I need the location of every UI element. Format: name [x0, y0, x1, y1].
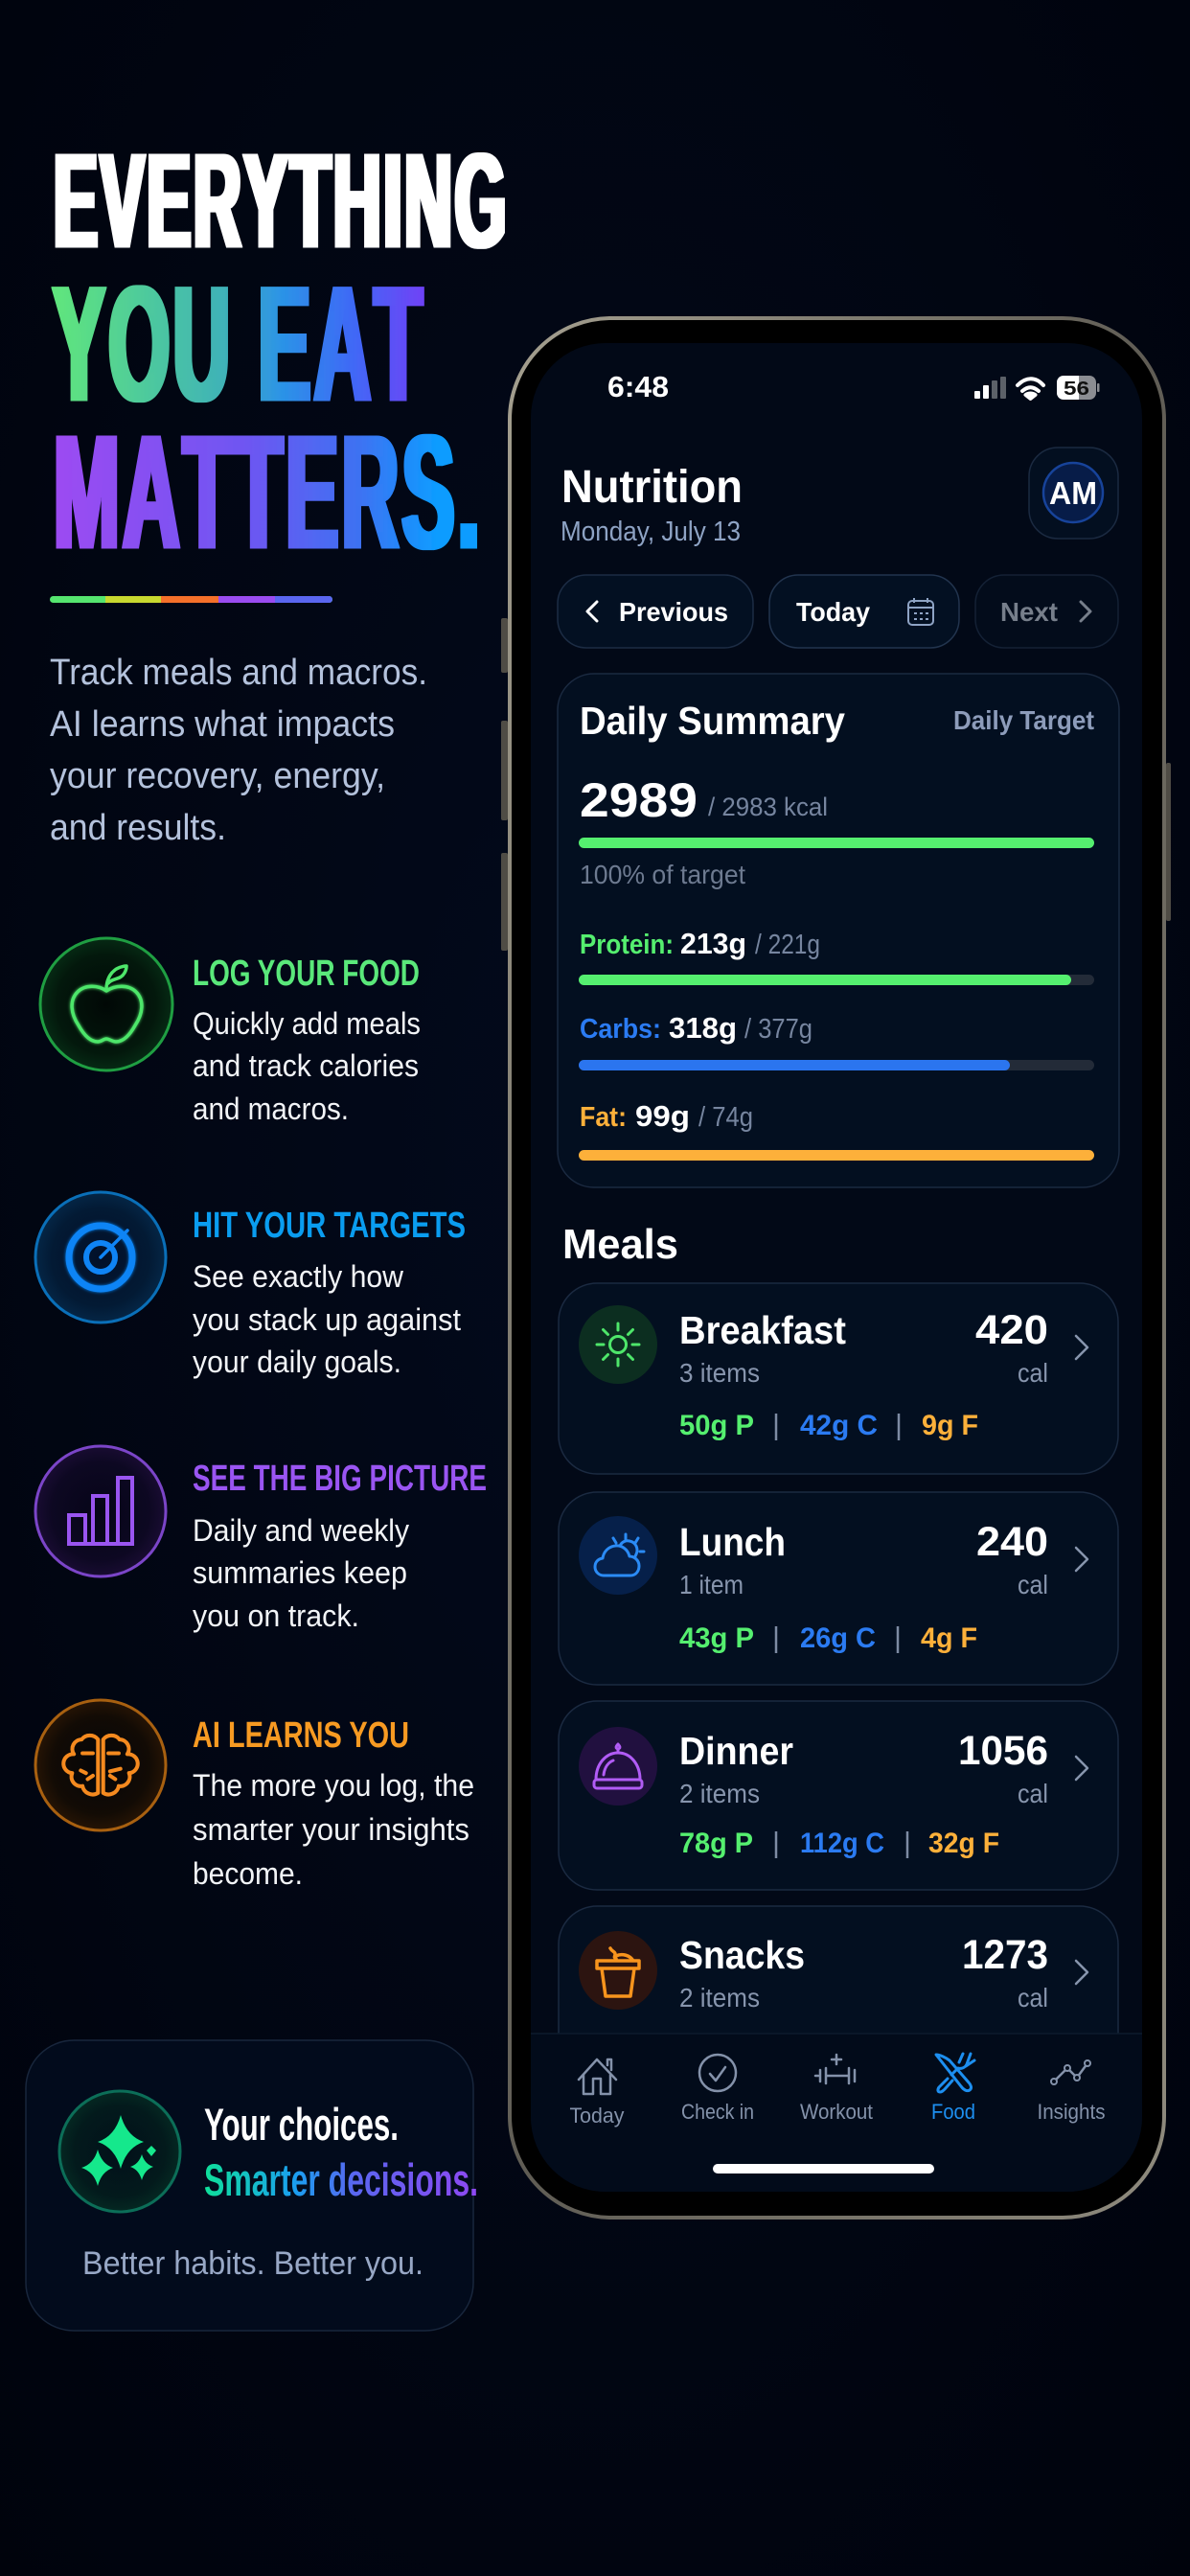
meal: dinner: 32g F [928, 1828, 999, 1859]
protein row: Protein: [580, 930, 674, 960]
status bar [608, 376, 1100, 401]
panel: daily summary: Daily Summary [580, 699, 845, 743]
feature: see the big picture: Daily and weekly [193, 1513, 409, 1548]
meal: lunch: cal [1018, 1570, 1048, 1599]
icon: cloche [579, 1727, 657, 1806]
feature: hit your targets: you stack up against [193, 1302, 461, 1337]
fat row: 99g [635, 1099, 690, 1133]
protein row [579, 933, 1094, 985]
feature: ai learns you [35, 1700, 474, 1891]
meal: breakfast: cal [1018, 1358, 1048, 1388]
intro paragraph [50, 653, 427, 848]
meal: snacks: Snacks [679, 1933, 805, 1977]
fat row: Fat: [580, 1102, 627, 1133]
icon: signal [974, 377, 1006, 399]
meal: breakfast: Breakfast [679, 1308, 846, 1352]
icon: wifi [1018, 379, 1043, 399]
meal: snacks [558, 1905, 1119, 2034]
icon: bar chart [35, 1446, 166, 1576]
carbs row: / 377g [744, 1014, 812, 1045]
icon: brain [35, 1700, 166, 1830]
meal: lunch [559, 1492, 1118, 1685]
nav: workout: Workout [800, 2100, 873, 2124]
avatar [1029, 448, 1118, 539]
feature: see the big picture: you on track. [193, 1598, 359, 1633]
fat row: / 74g [698, 1102, 753, 1133]
meal: breakfast: 420 [975, 1307, 1048, 1353]
meal: dinner: cal [1018, 1779, 1048, 1808]
meal: breakfast [559, 1283, 1118, 1474]
feature: hit your targets: HIT YOUR TARGETS [193, 1206, 466, 1246]
meal: snacks: 1273 [962, 1932, 1048, 1978]
icon: sun [579, 1305, 657, 1384]
nav: insights: Insights [1037, 2100, 1106, 2124]
meal: lunch: 4g F [921, 1622, 977, 1654]
meals heading: Meals [562, 1221, 678, 1268]
meal: breakfast: 9g F [922, 1410, 978, 1441]
panel: daily summary [558, 674, 1119, 1187]
bottom navigation [531, 2033, 1142, 2174]
nav: today [569, 2059, 625, 2128]
button: previous [558, 575, 753, 648]
callout: your choices [26, 2040, 478, 2331]
feature: see the big picture: summaries keep [193, 1555, 407, 1590]
meal: breakfast: 42g C [800, 1410, 878, 1441]
intro paragraph: Track meals and macros. [50, 653, 427, 693]
panel: daily summary: 100% of target [580, 860, 745, 889]
button: next [975, 575, 1118, 648]
button: previous: Previous [619, 597, 728, 627]
button: next: Next [1000, 597, 1058, 627]
calories bar [579, 838, 1094, 848]
nav: check in: Check in [681, 2100, 754, 2124]
icon: apple [40, 938, 172, 1070]
header: Monday, July 13 [561, 517, 741, 547]
panel: daily summary: 2989 [580, 773, 698, 827]
phone screen [531, 343, 1142, 2192]
nav: insights [1037, 2060, 1106, 2124]
button: today: Today [796, 597, 870, 627]
feature: log your food: and track calories [193, 1048, 419, 1083]
callout: your choices: Your choices. [204, 2099, 399, 2150]
icon: snack cup [579, 1931, 657, 2010]
avatar: AM [1049, 475, 1097, 511]
meal: lunch: 43g P [679, 1622, 754, 1654]
meal: lunch: 240 [976, 1519, 1048, 1565]
feature: ai learns you: smarter your insights [193, 1812, 469, 1847]
meal: dinner: 1056 [958, 1728, 1048, 1774]
button: today [769, 575, 959, 648]
feature: hit your targets [35, 1192, 466, 1379]
feature: log your food [40, 938, 421, 1126]
phone [501, 318, 1171, 2218]
status bar: 6:48 [607, 370, 669, 403]
meal: snacks: cal [1018, 1983, 1048, 2012]
meal: lunch: 26g C [800, 1622, 876, 1654]
intro paragraph: and results. [50, 808, 226, 848]
carbs row: Carbs: [580, 1014, 661, 1045]
meal: breakfast: 3 items [679, 1358, 760, 1388]
intro paragraph: AI learns what impacts [50, 704, 395, 745]
nav: check in [681, 2055, 754, 2124]
feature: hit your targets: See exactly how [193, 1259, 404, 1294]
meal: lunch: 1 item [679, 1570, 744, 1599]
protein row: 213g [680, 927, 746, 960]
icon: target [35, 1192, 166, 1322]
nav: food [931, 2054, 975, 2124]
header: Nutrition [561, 462, 743, 513]
feature: log your food: LOG YOUR FOOD [193, 954, 420, 994]
icon: sparkles [59, 2091, 180, 2212]
feature: see the big picture [35, 1446, 487, 1633]
callout: your choices: Better habits. Better you. [82, 2245, 423, 2282]
title: YOU EAT [53, 252, 425, 436]
phone side buttons [501, 618, 1171, 951]
nav: today: Today [569, 2104, 625, 2128]
icon: battery [1057, 376, 1100, 400]
meal: dinner [559, 1701, 1118, 1890]
carbs row [579, 1018, 1094, 1070]
meal: dinner: Dinner [679, 1729, 793, 1773]
fat row [579, 1106, 1094, 1161]
meal: dinner: 78g P [679, 1828, 753, 1859]
meal: snacks: 2 items [679, 1983, 760, 2012]
nav: workout [800, 2055, 873, 2124]
icon: battery: 56 [1064, 379, 1089, 400]
feature: log your food: Quickly add meals [193, 1006, 421, 1041]
callout: your choices: Smarter decisions. [204, 2154, 478, 2205]
icon: calendar [908, 598, 933, 625]
header [562, 469, 740, 546]
carbs row: 318g [669, 1011, 737, 1045]
meal: dinner: 112g C [800, 1828, 884, 1859]
feature: ai learns you: AI LEARNS YOU [193, 1715, 409, 1756]
protein row: / 221g [755, 930, 820, 960]
home indicator [713, 2164, 934, 2174]
panel: daily summary: / 2983 kcal [708, 793, 828, 821]
feature: log your food: and macros. [193, 1092, 349, 1126]
title: MATTERS. [54, 402, 483, 584]
feature: ai learns you: The more you log, the [193, 1768, 474, 1803]
feature: hit your targets: your daily goals. [193, 1345, 401, 1379]
feature: ai learns you: become. [193, 1856, 303, 1891]
phone frame [510, 318, 1164, 2218]
icon: cloud and sun [579, 1516, 657, 1595]
meal: breakfast: 50g P [679, 1410, 754, 1441]
rainbow divider [50, 596, 332, 603]
feature: see the big picture: SEE THE BIG PICTURE [193, 1459, 487, 1499]
text: EVERYTHING [54, 125, 509, 276]
nav: food: Food [931, 2100, 975, 2124]
meal: dinner: 2 items [679, 1779, 760, 1808]
meal: lunch: Lunch [679, 1520, 786, 1564]
title [53, 125, 509, 584]
panel: daily summary: Daily Target [953, 705, 1094, 735]
intro paragraph: your recovery, energy, [50, 756, 385, 796]
